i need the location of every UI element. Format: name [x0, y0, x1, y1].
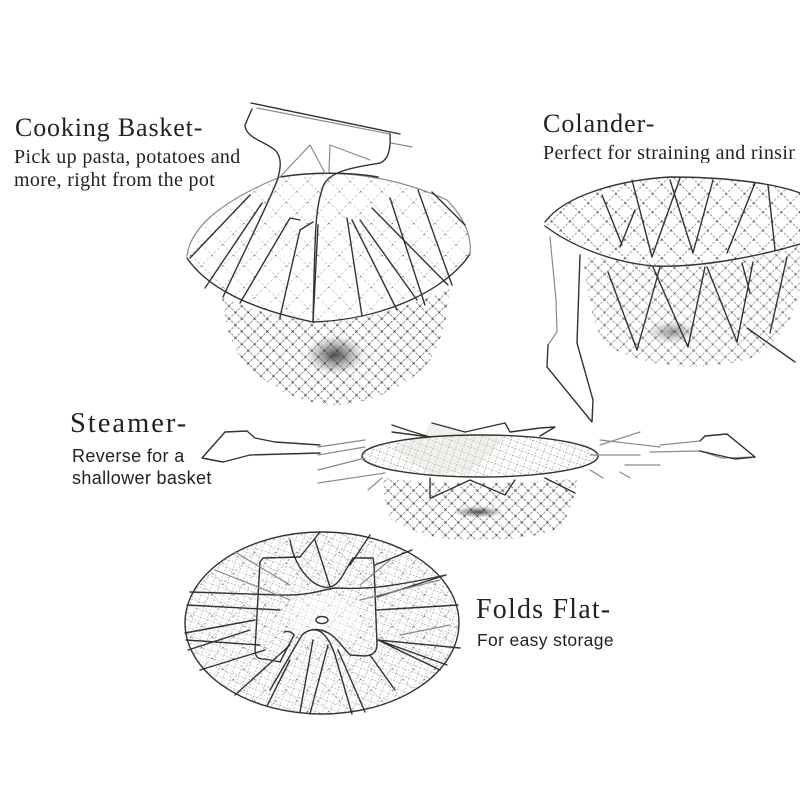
text: folds flat description: For easy storage	[477, 630, 614, 650]
colander wires	[602, 178, 787, 350]
heading: steamer: Steamer-	[70, 408, 188, 439]
cooking basket mesh top	[187, 173, 470, 322]
heading: colander: Colander-	[543, 109, 655, 138]
text: steamer description	[72, 446, 212, 488]
text: cooking basket description: Pick up pasta, potatoes and	[14, 146, 241, 168]
colander mesh bowl	[583, 246, 800, 367]
steamer mesh top	[362, 435, 598, 477]
steamer spokes	[318, 432, 660, 490]
steamer illustration	[202, 422, 755, 540]
cooking basket ribs	[280, 143, 412, 177]
colander rim	[545, 177, 800, 266]
heading: cooking basket: Cooking Basket-	[15, 113, 203, 142]
folded flat illustration	[185, 532, 460, 714]
text: steamer description: shallower basket	[72, 468, 212, 488]
colander handle	[548, 237, 557, 345]
flat basket radial wires	[185, 532, 460, 714]
heading: folds flat: Folds Flat-	[476, 594, 611, 625]
flat basket mesh	[185, 532, 459, 714]
steamer mesh bowl	[383, 478, 577, 540]
colander illustration	[545, 177, 800, 422]
steamer right handle	[650, 434, 755, 458]
cooking basket illustration	[187, 103, 470, 405]
flat basket rim	[185, 532, 459, 714]
steamer left handle	[202, 431, 320, 462]
flat basket handle	[255, 558, 377, 690]
text: cooking basket description	[14, 146, 241, 191]
colander mesh top	[545, 177, 800, 267]
cooking basket mesh bowl	[222, 288, 449, 405]
text: cooking basket description: more, right from the pot	[14, 169, 215, 191]
steamer rim	[362, 435, 598, 477]
text: steamer description: Reverse for a	[72, 446, 185, 466]
cooking basket rim	[187, 254, 470, 322]
cooking basket handle	[223, 103, 400, 297]
